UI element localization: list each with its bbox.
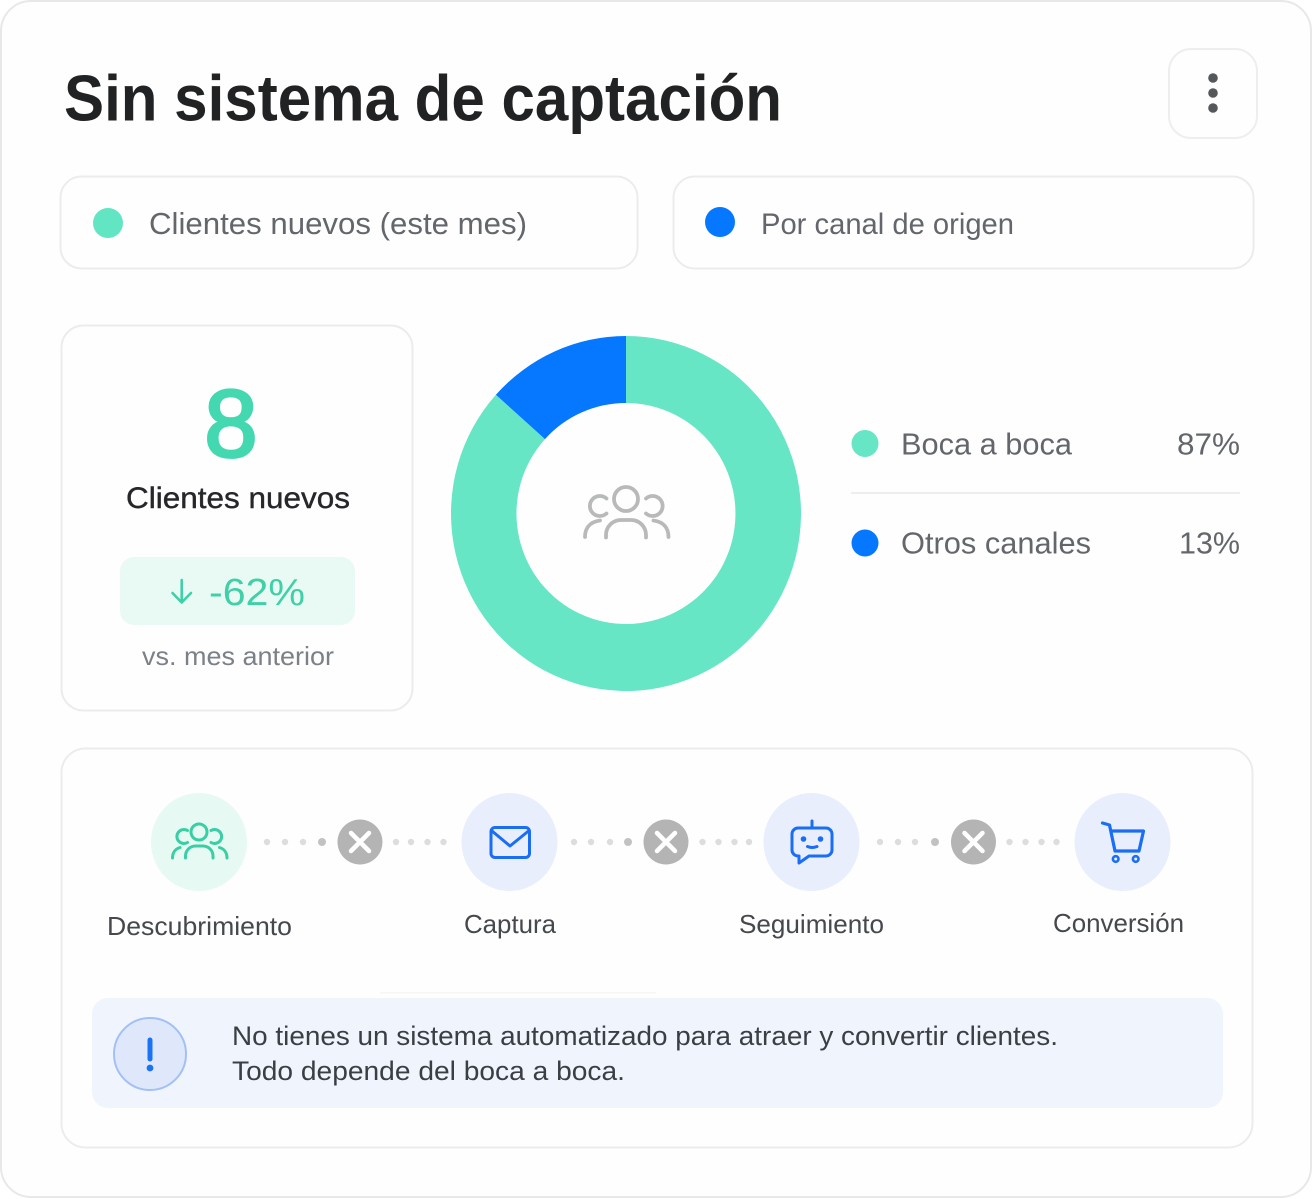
panel: stat card <box>62 326 412 710</box>
legend row: otros canales: Otros canales <box>901 526 1091 560</box>
legend row: otros canales: 13% <box>1179 526 1240 560</box>
stat label: Clientes nuevos <box>126 482 350 515</box>
callout text: No tienes un sistema automatizado para atraer y convertir clientes. <box>232 1021 1058 1051</box>
step: captura <box>462 793 558 939</box>
legend pill: por canal de origen <box>674 176 1254 268</box>
change value: -62% <box>209 572 305 614</box>
callout text: Todo depende del boca a boca. <box>232 1056 625 1086</box>
icon: people <box>172 824 227 858</box>
step label: Seguimiento <box>739 909 884 939</box>
menu button <box>1169 49 1257 138</box>
step: seguimiento <box>739 793 884 939</box>
legend pill: clientes nuevos <box>60 176 638 268</box>
legend pill: por canal de origen: Por canal de origen <box>761 208 1014 241</box>
icon: shopping cart <box>1102 823 1144 862</box>
icon: alert <box>114 1018 186 1090</box>
step label: Conversión <box>1053 908 1184 938</box>
legend row: otros canales <box>852 526 1240 560</box>
icon: people <box>585 487 668 538</box>
title: Sin sistema de captación <box>64 62 782 134</box>
callout <box>92 998 1223 1108</box>
connector 3 <box>877 820 1060 864</box>
panel: funnel <box>62 748 1252 1148</box>
legend row: boca a boca: Boca a boca <box>901 426 1073 462</box>
step label: Captura <box>464 909 557 939</box>
callout text <box>232 1021 1058 1086</box>
legend row: boca a boca <box>852 426 1240 462</box>
change badge <box>120 557 355 625</box>
comparison note: vs. mes anterior <box>142 641 334 671</box>
legend row: boca a boca: 87% <box>1177 426 1240 462</box>
big number: 8 <box>204 370 258 478</box>
step: descubrimiento <box>107 793 292 941</box>
legend pill: clientes nuevos: Clientes nuevos (este mes) <box>149 206 527 241</box>
donut chart <box>451 336 801 691</box>
connector 1 <box>264 820 447 864</box>
step: conversión <box>1053 793 1184 938</box>
icon: envelope <box>491 828 530 858</box>
icon: down arrow <box>172 580 191 602</box>
icon: chatbot <box>792 821 832 863</box>
step label: Descubrimiento <box>107 911 292 941</box>
connector 2 <box>571 820 752 864</box>
